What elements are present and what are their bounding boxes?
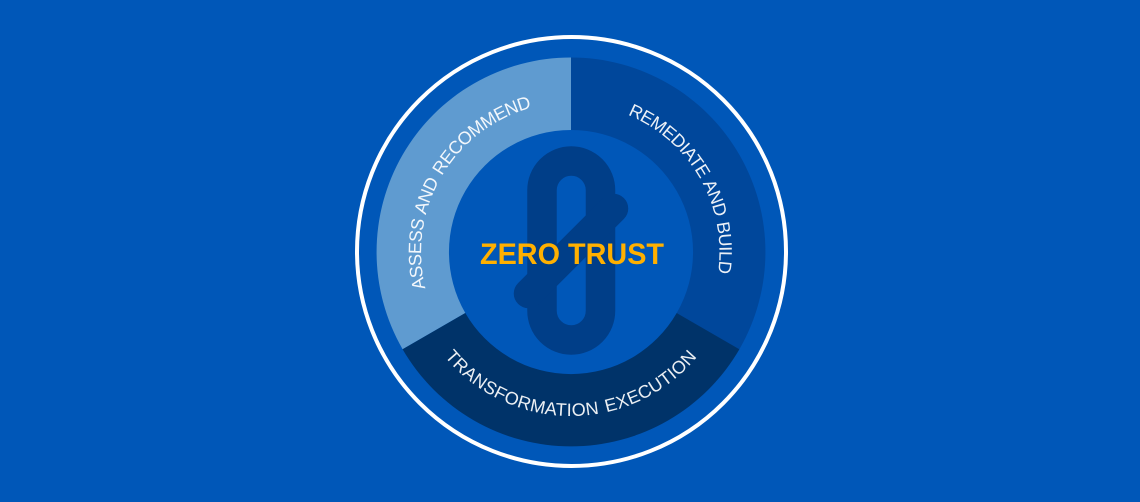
segment: assess and recommend: ASSESS AND RECOMMEND [408,97,530,288]
segment: assess and recommend [376,58,571,350]
segment: remediate and build: REMEDIATE AND BUILD [629,104,732,274]
segment: transformation execution: TRANSFORMATION EXECUTION [448,348,696,416]
title: zero trust: ZERO TRUST [480,238,664,271]
icon: zero symbol [528,161,614,340]
segment: transformation execution [402,313,740,446]
outer white ring [357,37,786,466]
segment: remediate and build [571,58,766,349]
